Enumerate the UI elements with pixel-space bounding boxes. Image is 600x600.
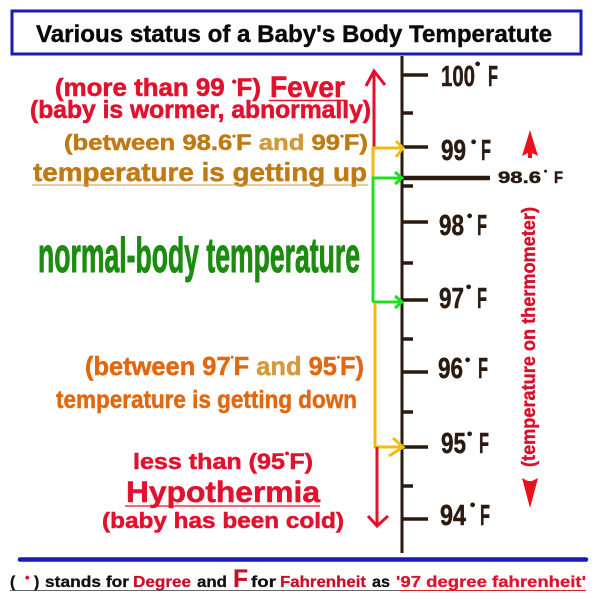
temperature labels: • xyxy=(465,352,470,369)
fever text: (more than 99 xyxy=(55,74,219,102)
rising temperature text: and 99 xyxy=(259,130,335,155)
thermometer axis caption: (temperature on thermometer) xyxy=(519,207,540,467)
temperature labels: 99 xyxy=(441,135,466,167)
fever text: (baby is wormer, abnormally) xyxy=(30,96,371,124)
temperature labels: • xyxy=(470,497,475,514)
hypothermia text: • xyxy=(285,448,289,460)
temperature labels: F xyxy=(477,283,487,315)
rising range arrow xyxy=(373,141,403,178)
title xyxy=(12,11,581,54)
hypothermia range arrow xyxy=(368,447,388,526)
rising temperature text: F xyxy=(236,130,259,155)
footnote: Fahrenheit xyxy=(280,574,367,591)
fever text: F) xyxy=(237,74,261,102)
hypothermia text: F) xyxy=(289,449,313,474)
falling range arrow xyxy=(375,303,403,456)
rising temperature text xyxy=(32,130,368,187)
footnote xyxy=(10,565,586,593)
temperature labels: • xyxy=(544,166,547,176)
temperature labels: F xyxy=(488,61,498,93)
falling temperature text xyxy=(56,351,364,414)
footnote: stands for xyxy=(45,574,129,591)
normal range arrow xyxy=(373,172,402,308)
temperature labels: 95 xyxy=(441,428,466,460)
falling temperature text: F xyxy=(234,351,256,381)
temperature labels: 94 xyxy=(440,500,466,532)
temperature labels: • xyxy=(467,208,472,225)
rising temperature text: temperature is getting up xyxy=(33,157,367,187)
temperature labels: F xyxy=(480,500,490,532)
falling temperature text: and 95 xyxy=(256,351,338,381)
temperature labels: F xyxy=(554,168,563,187)
hypothermia text xyxy=(102,448,344,533)
footnote: '97 degree fahrenheit' xyxy=(396,574,586,591)
temperature labels: 98.6 xyxy=(498,168,541,187)
rising temperature text: (between 98.6 xyxy=(64,130,208,155)
temperature labels: 96 xyxy=(438,353,463,385)
temperature labels xyxy=(438,56,563,532)
falling temperature text: F) xyxy=(340,351,364,381)
temperature labels: 98 xyxy=(439,210,464,242)
temperature labels: • xyxy=(471,134,476,151)
footnote: for xyxy=(251,574,276,591)
divider xyxy=(20,557,586,562)
temperature labels: • xyxy=(466,279,471,296)
rising temperature text: • xyxy=(232,131,236,141)
temperature labels: F xyxy=(477,210,487,242)
temperature labels: • xyxy=(467,426,472,443)
temperature labels: F xyxy=(479,428,489,460)
hypothermia text: less than (95 xyxy=(133,449,266,474)
rising temperature text: F) xyxy=(344,130,368,155)
temperature labels: • xyxy=(475,56,480,73)
falling temperature text: temperature is getting down xyxy=(56,386,357,414)
fever text: Fever xyxy=(270,71,345,104)
footnote: as xyxy=(372,574,390,591)
falling temperature text: • xyxy=(337,352,340,362)
footnote: ) xyxy=(34,574,39,591)
thermometer scale xyxy=(402,56,490,553)
temperature labels: F xyxy=(478,353,488,385)
fever text xyxy=(30,71,371,124)
title: Various status of a Baby's Body Temperatute xyxy=(36,21,552,48)
fever text: • xyxy=(232,74,237,89)
temperature labels: F xyxy=(481,135,491,167)
footnote: F xyxy=(233,565,248,593)
footnote: Degree xyxy=(133,574,191,591)
footnote: and xyxy=(197,574,227,591)
falling temperature text: (between 97 xyxy=(85,351,234,381)
hypothermia text: Hypothermia xyxy=(126,476,320,509)
temperature labels: 97 xyxy=(439,283,464,315)
footnote: ( xyxy=(10,574,16,591)
temperature labels: 100 xyxy=(441,61,475,93)
hypothermia text: (baby has been cold) xyxy=(102,508,344,533)
footnote: • xyxy=(25,570,30,585)
fever range arrow xyxy=(366,71,385,148)
falling temperature text: • xyxy=(231,352,234,362)
rising temperature text: • xyxy=(340,131,344,141)
